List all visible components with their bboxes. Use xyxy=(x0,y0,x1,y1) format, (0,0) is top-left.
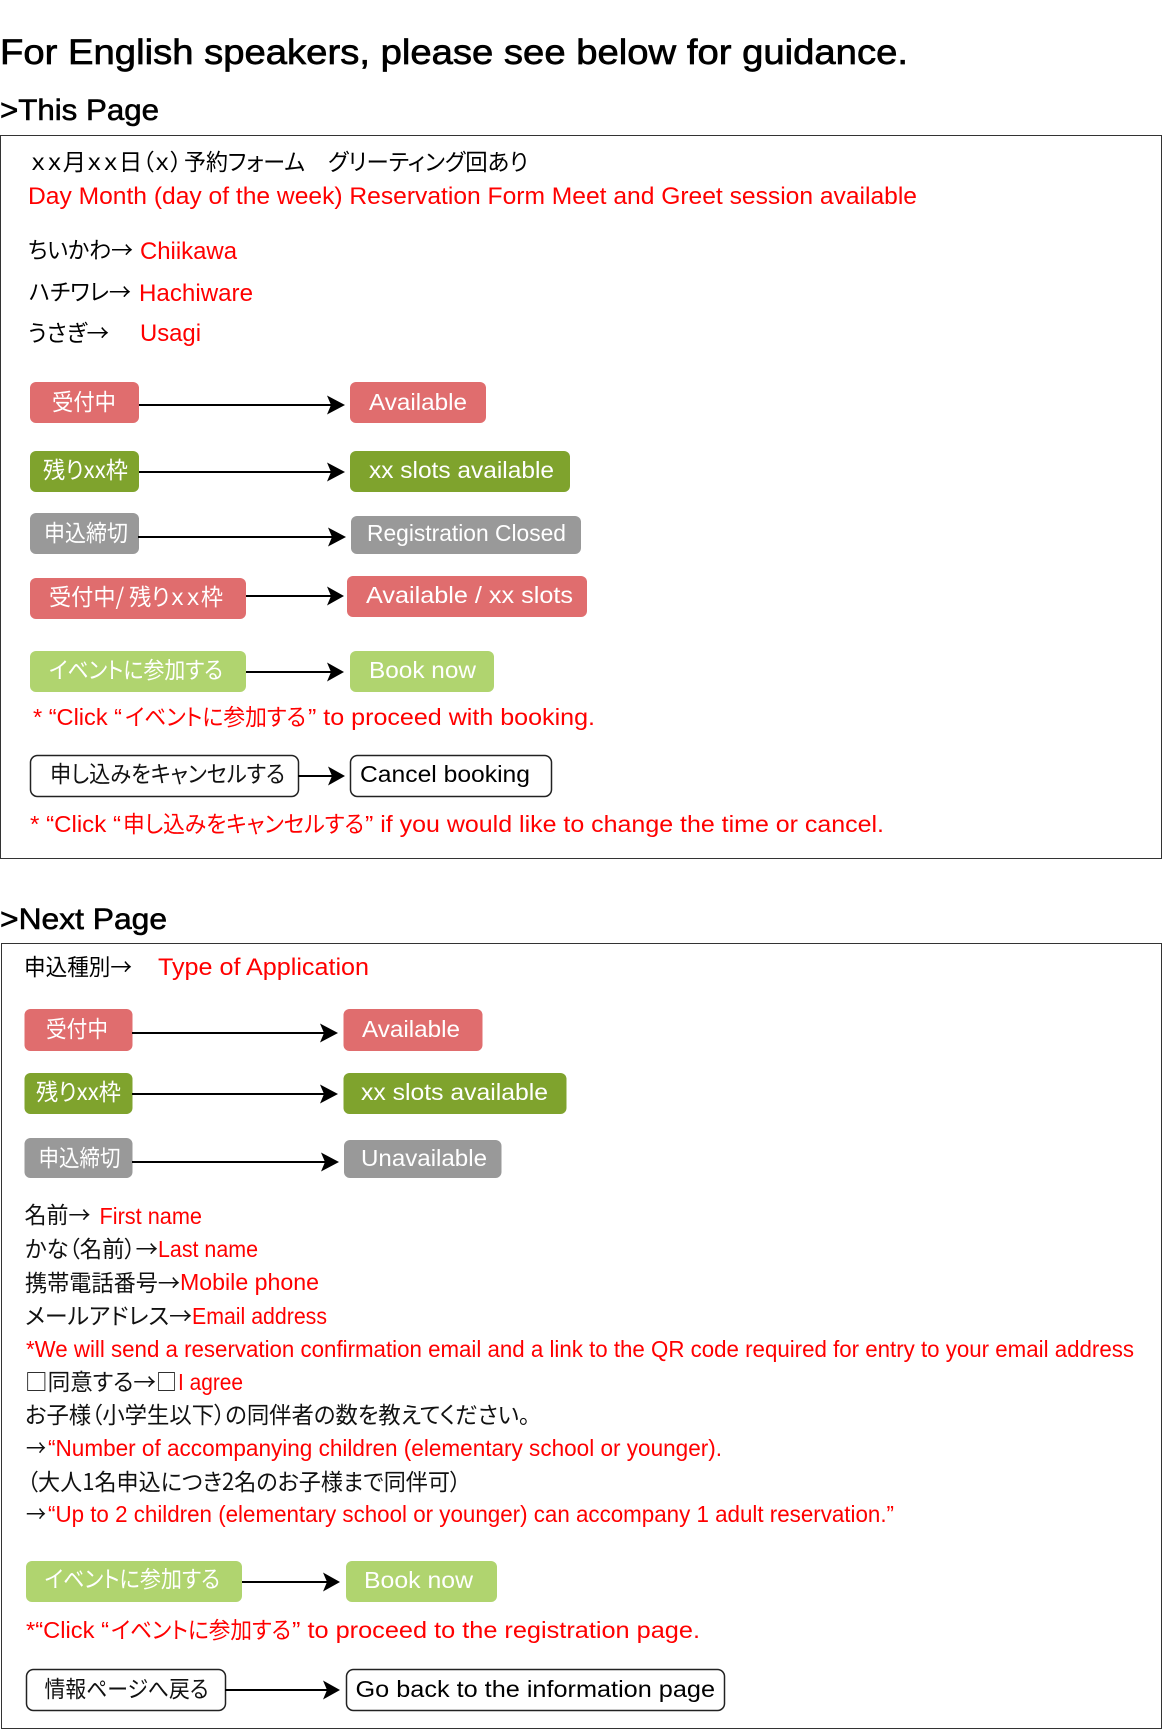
form title japanese: ｘｘ月ｘｘ日（ｘ） xyxy=(30,143,182,177)
name: hachiware: Hachiware xyxy=(139,280,253,307)
button: cancel booking xyxy=(350,756,552,796)
application type: 申込種別→ xyxy=(24,948,132,982)
badge: available: Available xyxy=(369,389,467,415)
application type: Type of Application xyxy=(158,954,369,981)
name: usagi: Usagi xyxy=(140,320,201,347)
translation: condition: → xyxy=(26,1495,46,1529)
field: agree: I agree xyxy=(178,1369,243,1395)
panel: next page xyxy=(2,944,1162,1728)
button: cancel booking: Cancel booking xyxy=(360,761,530,787)
button: join event: イベントに参加する xyxy=(44,1560,220,1594)
badge: remaining slots xyxy=(30,451,139,492)
form title japanese: 予約フォーム xyxy=(184,143,305,177)
badge: available: Available xyxy=(362,1016,460,1042)
form title japanese: グリーティング回あり xyxy=(328,143,528,177)
translation: children: → xyxy=(26,1429,46,1463)
heading: next page: >Next Page xyxy=(0,903,167,936)
button: book now xyxy=(346,1561,497,1602)
name: chiikawa xyxy=(28,231,238,265)
button: join event: イベントに参加する xyxy=(49,651,223,685)
translation: condition: “Up to 2 children (elementary school or younger) can accompany 1 adult reservation.” xyxy=(48,1501,894,1527)
name: usagi: うさぎ→ xyxy=(28,314,109,348)
field: email: Email address xyxy=(192,1303,327,1329)
note: booking: ” to proceed with booking. xyxy=(308,704,595,730)
badge: accepting: 受付中 xyxy=(46,1010,108,1044)
button: book now xyxy=(350,651,494,692)
badge: available xyxy=(344,1009,482,1051)
field: mobile phone xyxy=(25,1264,319,1298)
arrow xyxy=(132,1152,339,1172)
badge: unavailable: Unavailable xyxy=(361,1145,487,1171)
badge: closed: 申込締切 xyxy=(44,514,128,548)
badge: remaining slots: 残りxx枠 xyxy=(36,1073,121,1107)
field: agree: □ xyxy=(156,1363,177,1397)
badge: accepting xyxy=(30,382,139,423)
badge: accepting xyxy=(24,1009,132,1051)
note: registration: *“Click “ xyxy=(26,1617,109,1643)
note: cancel xyxy=(30,805,884,839)
field: email xyxy=(25,1297,327,1331)
arrow xyxy=(138,528,346,546)
note: registration: ” to proceed to the registration page. xyxy=(292,1617,700,1643)
badge: registration closed: Registration Closed xyxy=(367,520,566,546)
application type xyxy=(24,948,369,982)
name: hachiware: ハチワレ→ xyxy=(29,273,131,307)
button: back to information page xyxy=(346,1670,724,1710)
note: booking: * “Click “ xyxy=(33,704,122,730)
condition japanese: （大人1名申込につき2名のお子様まで同伴可） xyxy=(27,1463,461,1497)
badge: available / xx slots: Available / xx slots xyxy=(366,582,573,608)
form title translation: Day Month (day of the week) Reservation Form Meet and Greet session available xyxy=(28,183,917,210)
arrow xyxy=(132,1084,338,1104)
button: back to information page: Go back to the information page xyxy=(356,1676,715,1702)
field: mobile phone: Mobile phone xyxy=(180,1269,319,1295)
button: back japanese: 情報ページへ戻る xyxy=(44,1670,208,1704)
arrow xyxy=(246,586,344,606)
badge: registration closed xyxy=(351,516,581,554)
button: book now: Book now xyxy=(369,657,476,683)
arrow xyxy=(139,462,345,482)
button: cancel japanese: 申し込みをキャンセルする xyxy=(50,755,285,789)
badge: xx slots available: xx slots available xyxy=(361,1079,548,1105)
note: cancel: 申し込みをキャンセルする xyxy=(123,805,364,839)
arrow xyxy=(242,1572,340,1592)
arrow xyxy=(246,662,344,682)
field: last name xyxy=(25,1230,258,1264)
name: hachiware xyxy=(29,273,253,307)
badge: closed: 申込締切 xyxy=(38,1139,120,1173)
badge: remaining slots xyxy=(24,1073,132,1114)
arrow xyxy=(139,396,345,414)
badge: available xyxy=(350,382,486,423)
field: last name: Last name xyxy=(158,1236,258,1262)
field: agree: □同意する→ xyxy=(25,1363,156,1397)
note: booking: イベントに参加する xyxy=(125,698,306,732)
note: cancel: ” if you would like to change the time or cancel. xyxy=(365,811,884,837)
question: children japanese: お子様（小学生以下）の同伴者の数を教えてください。 xyxy=(25,1396,530,1430)
panel: this page xyxy=(0,136,1162,858)
note: confirmation email: *We will send a reservation confirmation email and a link to the QR code required for entry to your email address xyxy=(26,1336,1134,1362)
field: email: メールアドレス→ xyxy=(25,1297,192,1331)
badge: available / xx slots xyxy=(347,576,587,617)
form title japanese xyxy=(30,143,528,177)
name: chiikawa: ちいかわ→ xyxy=(28,231,133,265)
badge: closed xyxy=(30,513,139,554)
heading: this page: >This Page xyxy=(0,94,159,127)
button: book now: Book now xyxy=(364,1567,473,1593)
badge: accepting with remaining slots: 受付中/ 残りｘｘ枠 xyxy=(49,578,223,612)
title: For English speakers, please see below for guidance. xyxy=(0,33,908,72)
arrow xyxy=(298,766,345,786)
badge: xx slots available xyxy=(350,451,570,492)
field: mobile phone: 携帯電話番号→ xyxy=(25,1264,180,1298)
badge: accepting with remaining slots xyxy=(30,578,246,619)
note: registration xyxy=(26,1611,700,1645)
field: last name: かな（名前）→ xyxy=(25,1230,158,1264)
badge: accepting: 受付中 xyxy=(52,383,116,417)
badge: xx slots available: xx slots available xyxy=(369,457,554,483)
field: agree xyxy=(25,1363,243,1397)
note: booking xyxy=(33,698,595,732)
field: first name: First name xyxy=(100,1203,202,1229)
field: first name: 名前→ xyxy=(24,1196,90,1230)
field: first name xyxy=(24,1196,202,1230)
note: registration: イベントに参加する xyxy=(111,1611,291,1645)
badge: unavailable xyxy=(344,1140,502,1178)
name: usagi xyxy=(28,314,201,348)
translation: children: “Number of accompanying children (elementary school or younger). xyxy=(48,1435,722,1461)
badge: xx slots available xyxy=(344,1073,566,1114)
badge: remaining slots: 残りxx枠 xyxy=(43,451,128,485)
name: chiikawa: Chiikawa xyxy=(140,238,238,265)
arrow xyxy=(225,1680,340,1700)
arrow xyxy=(132,1024,338,1042)
note: cancel: * “Click “ xyxy=(30,811,121,837)
